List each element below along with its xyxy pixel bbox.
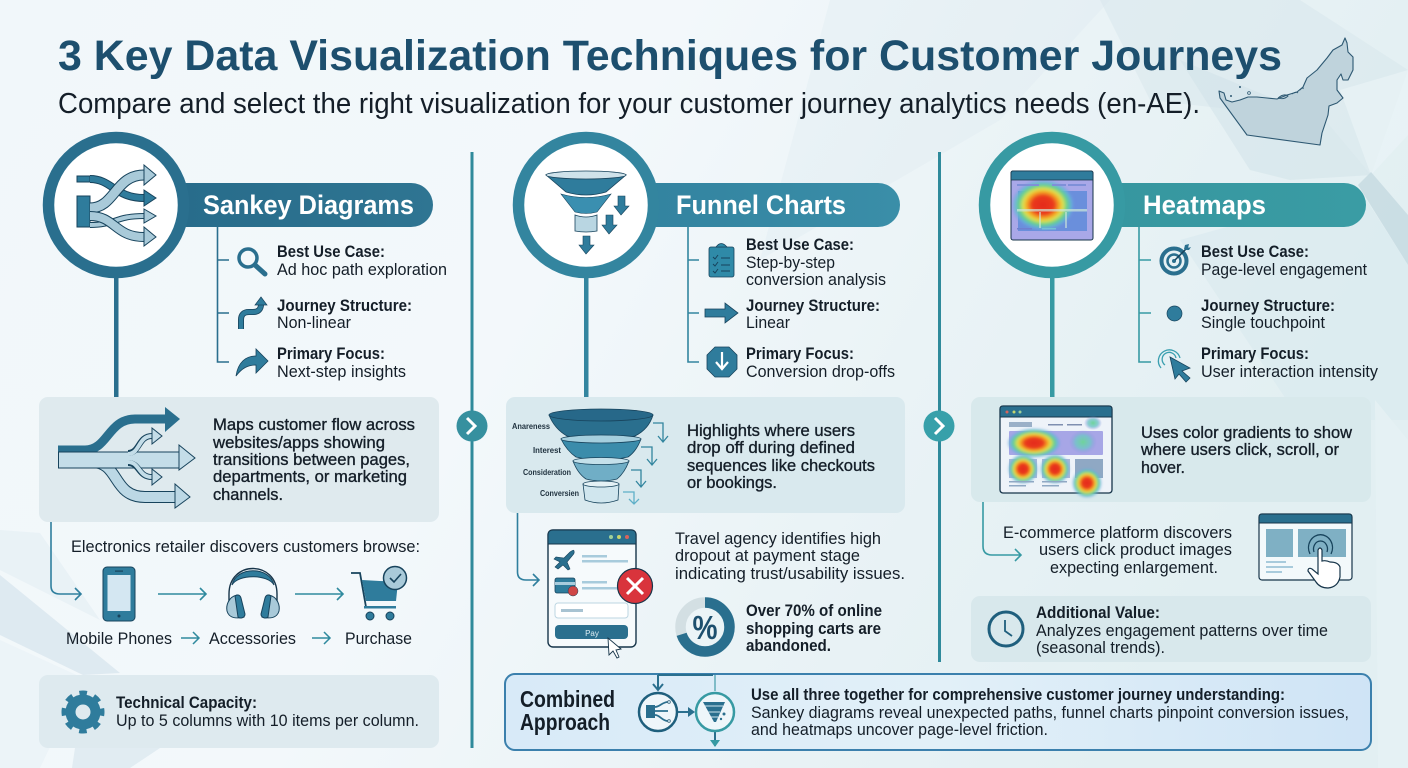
item: best use case (277, 242, 447, 279)
panel: funnel description (506, 397, 905, 513)
description text: sequences like checkouts (687, 456, 875, 475)
capacity text (116, 693, 419, 730)
chart: funnel stages: Conversien (540, 488, 579, 498)
icon: heatmap window in ring (984, 138, 1120, 272)
item: best use case: conversion analysis (746, 270, 886, 289)
description text: Maps customer flow across (213, 415, 415, 434)
item: journey structure: Journey Structure: (277, 296, 412, 315)
divider with chevron (456, 152, 488, 748)
icon: funnel in ring (518, 138, 654, 272)
title: 3 Key Data Visualization Techniques for Customer Journeys (58, 32, 1282, 80)
example text: expecting enlargement. (1050, 558, 1218, 577)
item: best use case (1201, 242, 1367, 279)
item: best use case: Page-level engagement (1201, 260, 1367, 279)
icon: clipboard checklist (709, 244, 734, 277)
heading pill: Sankey Diagrams (150, 183, 433, 227)
item: primary focus (277, 344, 406, 381)
chart: funnel stages (512, 409, 668, 504)
icon: single dot (1167, 306, 1182, 321)
combined text (751, 685, 1349, 739)
item: best use case (746, 235, 886, 289)
item: primary focus: User interaction intensity (1201, 362, 1378, 381)
combined text: Use all three together for comprehensive customer journey understanding: (751, 685, 1285, 704)
heading: combined approach (520, 686, 615, 735)
chart: funnel stages: Interest (533, 445, 561, 455)
column: Funnel Charts (506, 138, 905, 658)
description text: transitions between pages, (213, 450, 410, 469)
item: best use case: Best Use Case: (277, 242, 385, 261)
connector (114, 270, 118, 398)
item: best use case: Best Use Case: (1201, 242, 1309, 261)
chart: 70 percent donut (680, 602, 730, 652)
description text (1140, 423, 1353, 477)
heading pill: Funnel Charts (620, 183, 900, 227)
heading: combined approach: Combined (520, 686, 615, 712)
capacity text: Technical Capacity: (116, 693, 257, 712)
heading pill: Funnel Charts: Funnel Charts (676, 190, 846, 220)
example text (675, 529, 905, 583)
arrow (312, 632, 330, 644)
description text (212, 415, 415, 504)
icon: sankey in ring (48, 138, 184, 272)
item: journey structure: Journey Structure: (1201, 296, 1335, 315)
tree lines (218, 227, 229, 362)
heading: combined approach: Approach (520, 709, 610, 735)
item: primary focus: Primary Focus: (1201, 344, 1309, 363)
icon: target (1162, 244, 1191, 274)
item: journey structure (277, 296, 412, 332)
icon: click cursor (1158, 350, 1190, 382)
stat text: Over 70% of online (746, 601, 882, 620)
divider with chevron (924, 152, 954, 662)
icon: linear arrow (705, 303, 738, 323)
description text (687, 421, 875, 492)
additional value text: Additional Value: (1036, 603, 1160, 622)
item: journey structure: Single touchpoint (1201, 313, 1325, 332)
description text: Highlights where users (687, 421, 855, 440)
item: journey structure (746, 296, 880, 332)
icon: clock (989, 612, 1023, 646)
icon: gear (64, 693, 102, 731)
example text: indicating trust/usability issues. (675, 564, 905, 583)
column: Sankey Diagrams (39, 138, 447, 748)
combined text: and heatmaps uncover page-level friction. (751, 720, 1048, 739)
example text (1003, 523, 1232, 577)
item: primary focus: Primary Focus: (746, 344, 854, 363)
chart: funnel stages: Anareness (512, 421, 550, 431)
column: Heatmaps (971, 138, 1378, 662)
panel: combined approach (505, 674, 1371, 750)
icon: cart with check (351, 566, 406, 620)
arrow: to example (983, 502, 1021, 561)
item: journey structure (1201, 296, 1335, 332)
arrow (158, 588, 206, 600)
tree lines (688, 227, 699, 362)
description text: Uses color gradients to show (1141, 423, 1353, 442)
icon: headphones (227, 568, 279, 618)
example text: dropout at payment stage (675, 546, 860, 565)
icon: sankey badge (639, 693, 677, 731)
flow arrows (653, 675, 715, 746)
panel: additional value (971, 596, 1371, 662)
additional value text: (seasonal trends). (1036, 638, 1165, 657)
label: Accessories: Accessories (209, 629, 296, 648)
arrow (295, 588, 343, 600)
example heading: Electronics retailer discovers customers browse: (71, 537, 420, 556)
description text: websites/apps showing (212, 433, 385, 452)
item: journey structure: Non-linear (277, 313, 351, 332)
description text: where users click, scroll, or (1140, 440, 1339, 459)
panel: heatmap description (971, 397, 1371, 502)
combined text: Sankey diagrams reveal unexpected paths, funnel charts pinpoint conversion issues, (751, 703, 1349, 722)
chart: 70 percent donut: % (692, 609, 718, 646)
icon: product page with tap (1259, 514, 1352, 588)
icon: UAE map (1219, 38, 1353, 145)
item: best use case: Step-by-step (746, 253, 835, 272)
description text: departments, or marketing (213, 467, 407, 486)
description text: drop off during defined (687, 438, 855, 457)
additional value text (1036, 603, 1328, 657)
item: primary focus (1201, 344, 1378, 381)
item: primary focus: Primary Focus: (277, 344, 385, 363)
example text: E-commerce platform discovers (1003, 523, 1232, 542)
item: primary focus: Conversion drop-offs (746, 362, 895, 381)
icon: booking window with error (548, 530, 652, 658)
item: best use case: Ad hoc path exploration (277, 260, 447, 279)
stat text (746, 601, 882, 655)
item: journey structure: Journey Structure: (746, 296, 880, 315)
icon: drop-off octagon (707, 347, 737, 377)
connector (1050, 270, 1054, 398)
subtitle: Compare and select the right visualization for your customer journey analytics needs (en-AE). (58, 88, 1200, 120)
item: primary focus: Next-step insights (277, 362, 406, 381)
icon: next-step arrow (236, 349, 268, 376)
label: Purchase: Purchase (345, 629, 412, 648)
panel: sankey description (39, 397, 439, 522)
icon: booking window with error: Pay (585, 629, 599, 638)
item: journey structure: Linear (746, 313, 790, 332)
label: Mobile Phones: Mobile Phones (66, 629, 172, 648)
example text: Travel agency identifies high (675, 529, 881, 548)
chart: funnel stages: Consideration (523, 467, 571, 477)
item: primary focus (746, 344, 895, 381)
description text: channels. (213, 485, 283, 504)
heading pill: Heatmaps (1090, 183, 1366, 227)
arrow: to example (51, 522, 81, 600)
stat text: abandoned. (746, 636, 831, 655)
stat text: shopping carts are (746, 619, 881, 638)
arrow (181, 632, 199, 644)
heading pill: Sankey Diagrams: Sankey Diagrams (203, 190, 414, 220)
example text: users click product images (1039, 540, 1232, 559)
icon: funnel badge (696, 693, 734, 731)
icon: heatmap page (1000, 406, 1112, 498)
heading pill: Heatmaps: Heatmaps (1143, 190, 1266, 220)
connector (584, 270, 588, 398)
capacity text: Up to 5 columns with 10 items per column. (116, 711, 419, 730)
additional value text: Analyzes engagement patterns over time (1036, 621, 1328, 640)
icon: magnifier (239, 249, 265, 274)
icon: phone (103, 567, 135, 621)
item: best use case: Best Use Case: (746, 235, 854, 254)
description text: hover. (1141, 458, 1185, 477)
tree lines (1139, 227, 1151, 362)
icon: sankey flow (58, 407, 195, 508)
description text: or bookings. (687, 473, 777, 492)
icon: curved arrow up (241, 297, 267, 329)
panel: technical capacity (39, 675, 439, 748)
arrow: to example (518, 513, 539, 586)
